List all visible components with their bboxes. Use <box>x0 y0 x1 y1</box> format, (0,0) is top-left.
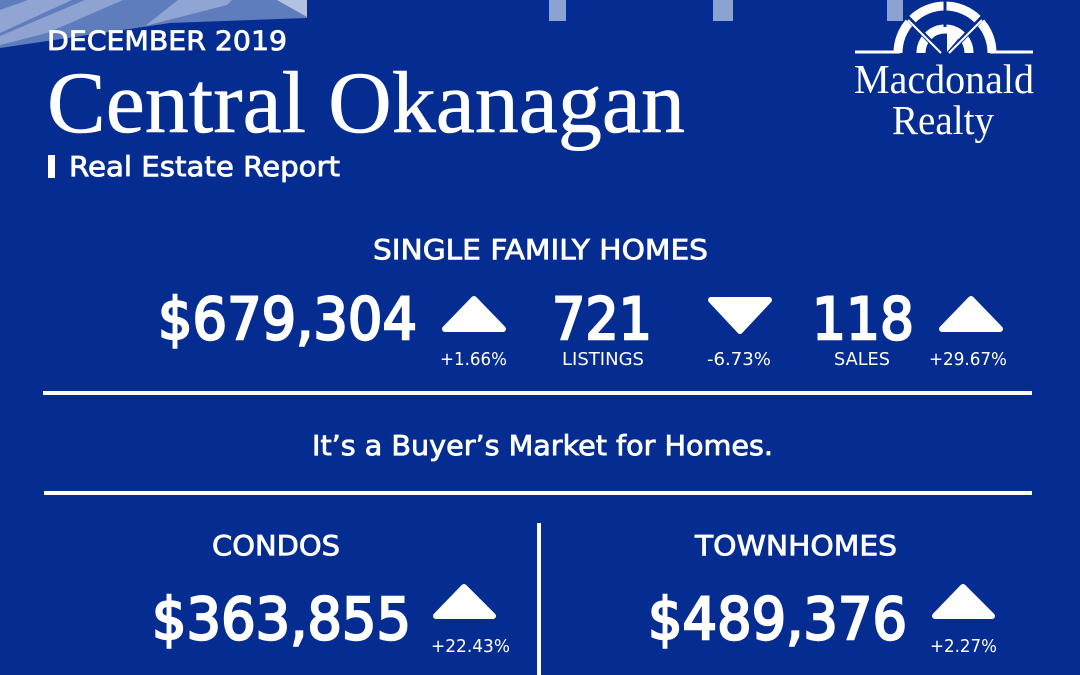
logo: Macdonald Realty <box>854 0 1034 143</box>
panel: condos <box>152 529 510 657</box>
panel: townhomes: TOWNHOMES <box>694 529 897 562</box>
stat: sales: +29.67% <box>929 349 1007 370</box>
panel: townhomes <box>648 529 997 657</box>
stat: single family price: $679,304 <box>158 285 417 353</box>
logo: Macdonald Realty: Macdonald <box>854 56 1034 102</box>
panel: condos: +22.43% <box>431 636 510 657</box>
logo: Macdonald Realty: Realty <box>892 97 994 143</box>
section heading: single family homes: SINGLE FAMILY HOMES <box>373 233 708 266</box>
panel: condos: CONDOS <box>212 529 340 562</box>
stat: sales <box>812 285 1007 370</box>
panel: condos: $363,855 <box>152 585 411 653</box>
decorative building graphic <box>0 0 903 48</box>
panel: townhomes: +2.27% <box>930 636 997 657</box>
stat: single family price <box>158 285 507 370</box>
stat: listings: LISTINGS <box>562 349 644 370</box>
stat: listings: 721 <box>552 285 652 353</box>
date heading: DECEMBER 2019 <box>47 26 287 57</box>
subtitle: Real Estate Report <box>69 150 340 183</box>
title: Central Okanagan <box>47 55 685 152</box>
stat: listings: -6.73% <box>707 349 771 370</box>
stat: single family price: +1.66% <box>440 349 507 370</box>
panel: townhomes: $489,376 <box>648 585 907 653</box>
stat: listings <box>552 285 771 370</box>
market statement: It’s a Buyer’s Market for Homes. <box>312 429 773 462</box>
stat: sales: SALES <box>834 349 890 370</box>
stat: sales: 118 <box>812 285 914 353</box>
